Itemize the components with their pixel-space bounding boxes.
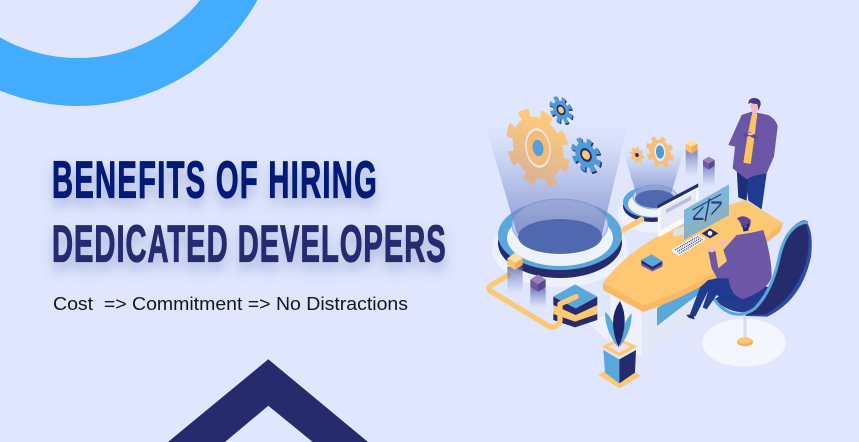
torso xyxy=(723,230,772,299)
plant in pot xyxy=(598,301,641,388)
illustration: isometric developer workspace xyxy=(485,96,812,388)
chair rim xyxy=(714,222,807,314)
floating data cubes xyxy=(686,140,715,187)
left leaf xyxy=(605,312,617,347)
chair and seated developer xyxy=(686,216,812,319)
arm xyxy=(708,251,729,278)
shirt xyxy=(743,114,757,164)
hands xyxy=(748,133,754,135)
subtitle: Cost => Commitment => No Distractions xyxy=(53,294,408,314)
decorative navy chevron xyxy=(168,359,368,442)
legs xyxy=(746,168,767,209)
small light beam xyxy=(622,147,685,197)
chair back inner xyxy=(747,223,809,315)
desk top xyxy=(603,200,783,312)
book xyxy=(641,254,662,271)
hair xyxy=(748,98,761,111)
server stack xyxy=(553,284,597,327)
desk panel xyxy=(610,230,765,357)
keyboard xyxy=(671,234,706,256)
legs xyxy=(690,276,763,317)
pot base xyxy=(598,371,641,388)
small blue gear xyxy=(551,96,571,125)
pot rim xyxy=(602,338,637,357)
large platform well xyxy=(518,219,602,254)
hair and ear xyxy=(743,223,749,232)
small platform well xyxy=(635,190,675,208)
hands xyxy=(708,240,727,252)
pot right face xyxy=(619,350,636,383)
white monitor xyxy=(657,183,699,237)
centre leaf xyxy=(613,301,625,347)
pipes and server stack xyxy=(489,219,642,342)
orange pipe xyxy=(489,275,576,327)
neck xyxy=(752,108,757,116)
large orange gear xyxy=(510,108,566,188)
title line 1: BENEFITS OF HIRING xyxy=(52,151,377,209)
coat xyxy=(728,112,778,179)
mouse pad xyxy=(702,228,718,238)
large platform xyxy=(492,199,628,287)
chair back outer xyxy=(745,220,812,317)
shoe xyxy=(686,314,695,319)
decorative blue arc xyxy=(0,0,283,106)
title line 2: DEDICATED DEVELOPERS xyxy=(52,215,446,273)
code symbol: </> xyxy=(692,187,723,235)
large light beam xyxy=(485,123,628,234)
orange cube with bar xyxy=(507,253,523,293)
small platform xyxy=(618,185,686,233)
purple cube with bar xyxy=(530,274,546,308)
desk equipment xyxy=(641,183,729,271)
right leaf xyxy=(620,313,632,347)
medium blue gear xyxy=(574,137,600,174)
pot left face xyxy=(603,350,619,383)
standing man xyxy=(728,98,778,209)
floor shadow xyxy=(587,315,608,342)
head xyxy=(737,216,751,231)
seat xyxy=(714,280,769,312)
title xyxy=(52,151,446,273)
small orange gears xyxy=(632,137,671,167)
head xyxy=(750,100,759,112)
connecting pipe to small platform xyxy=(623,219,642,230)
crossed arms xyxy=(743,132,758,139)
soil xyxy=(608,341,631,353)
chair shadow and stem xyxy=(702,315,786,367)
